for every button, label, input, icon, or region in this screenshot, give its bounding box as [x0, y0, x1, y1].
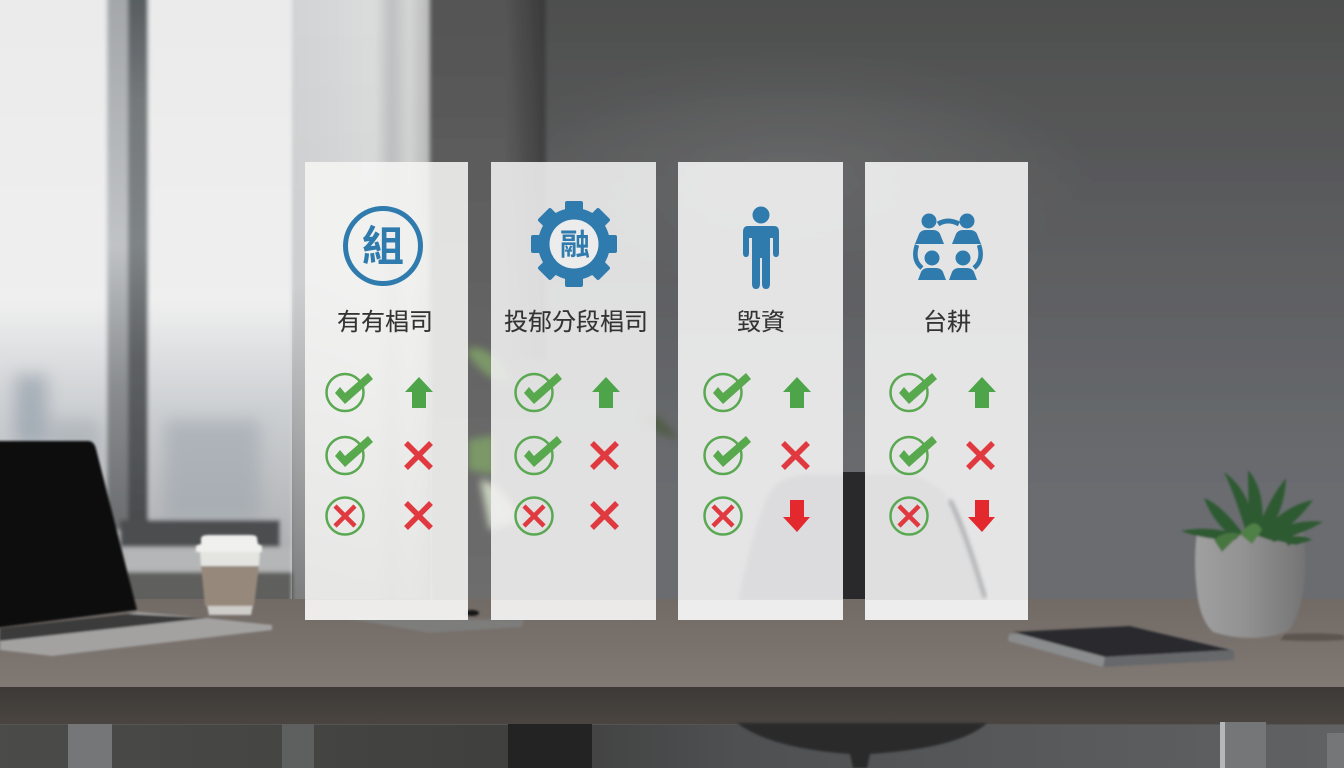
laptop [0, 441, 272, 656]
desk [0, 599, 1344, 768]
panel heading: 投郁分段椙司 [504, 309, 648, 336]
curtain [292, 0, 430, 610]
icon: 融 in gear [531, 201, 617, 287]
icon: 融 in gear: 融 [560, 229, 590, 262]
panel: 投郁分段椙司 [491, 162, 656, 620]
panel: 毀資 [678, 162, 843, 620]
row 1 [326, 373, 433, 411]
row 1 [516, 373, 620, 411]
row 2 [704, 436, 808, 474]
row 3 [516, 498, 617, 534]
notebook on desk [345, 610, 524, 633]
icon: team [915, 214, 981, 280]
row 3 [890, 498, 995, 534]
icon: 組 in circle [346, 208, 420, 284]
row 2 [890, 436, 993, 474]
row 1 [890, 373, 996, 411]
coffee cup [196, 535, 262, 615]
row 2 [326, 436, 431, 474]
row 3 [326, 498, 431, 534]
row 1 [704, 373, 811, 411]
panel heading: 台耕 [923, 309, 971, 336]
plant pot [1181, 470, 1344, 641]
panel: 有有椙司 [305, 162, 468, 620]
panel heading: 有有椙司 [337, 309, 433, 336]
row 2 [516, 436, 617, 474]
row 3 [704, 498, 810, 534]
icon: person [743, 206, 779, 289]
dark notebook right [1008, 626, 1234, 667]
chair behind panels [843, 472, 865, 600]
panel: 台耕 [865, 162, 1028, 620]
plant behind panels [468, 348, 680, 530]
icon: 組 in circle: 組 [362, 223, 404, 270]
window [0, 0, 305, 602]
panel heading: 毀資 [737, 309, 785, 336]
